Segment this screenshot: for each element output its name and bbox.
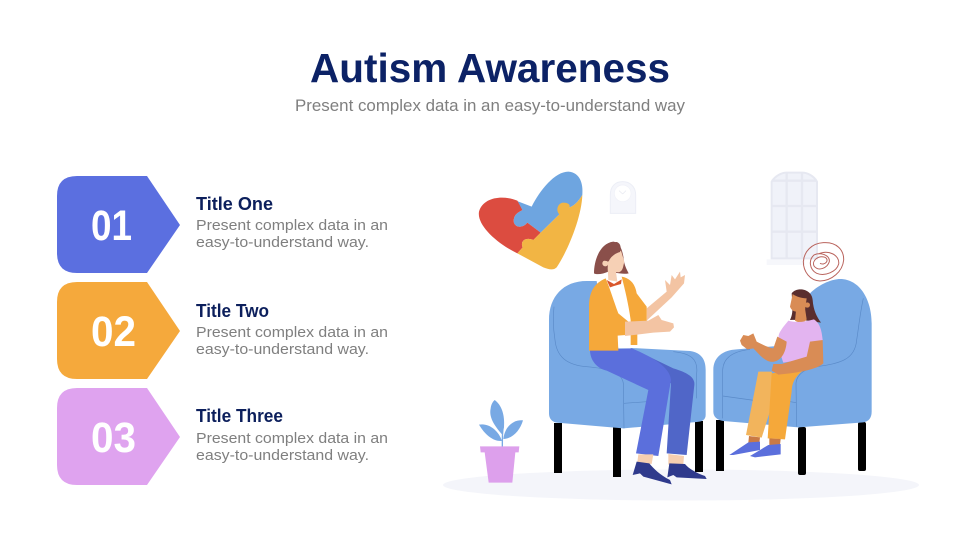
description 3: [196, 430, 388, 464]
description 2: easy-to-understand way.: [196, 341, 369, 358]
icon: clock: [610, 182, 636, 213]
icon: puzzle heart: [479, 172, 582, 269]
girl legs and shoes: [729, 368, 807, 457]
chair legs: [554, 420, 866, 477]
icon: window: [767, 173, 817, 265]
woman torso, arms and head: [589, 242, 685, 351]
heading: title one: Title One: [196, 194, 273, 214]
plant in pot: [479, 400, 523, 483]
heading: title three: Title Three: [196, 406, 283, 426]
scribble thought: [803, 243, 844, 281]
item 3: [57, 388, 388, 485]
girl: [729, 289, 823, 457]
badge 03: [57, 388, 180, 485]
item 1: [57, 176, 388, 273]
description 2: Present complex data in an: [196, 324, 388, 341]
description 1: easy-to-understand way.: [196, 234, 369, 251]
description 2: [196, 324, 388, 358]
number 02: 02: [91, 308, 136, 356]
description 3: Present complex data in an: [196, 430, 388, 447]
number 03: 03: [91, 414, 136, 462]
girl torso, arms and head: [740, 289, 823, 375]
illustration: therapy session: [443, 172, 919, 500]
badge 01: [57, 176, 180, 273]
heading: title two: Title Two: [196, 301, 269, 321]
left armchair: [549, 281, 706, 428]
right armchair: [713, 279, 872, 427]
title: Autism Awareness: [310, 45, 670, 91]
woman: [589, 242, 707, 484]
woman legs and shoes: [590, 348, 707, 484]
description 1: [196, 217, 388, 251]
description 1: Present complex data in an: [196, 217, 388, 234]
subtitle: Present complex data in an easy-to-understand way: [295, 97, 686, 115]
badge 02: [57, 282, 180, 379]
item 2: [57, 282, 388, 379]
floor shadow: [443, 470, 919, 500]
description 3: easy-to-understand way.: [196, 447, 369, 464]
number 01: 01: [91, 202, 132, 250]
